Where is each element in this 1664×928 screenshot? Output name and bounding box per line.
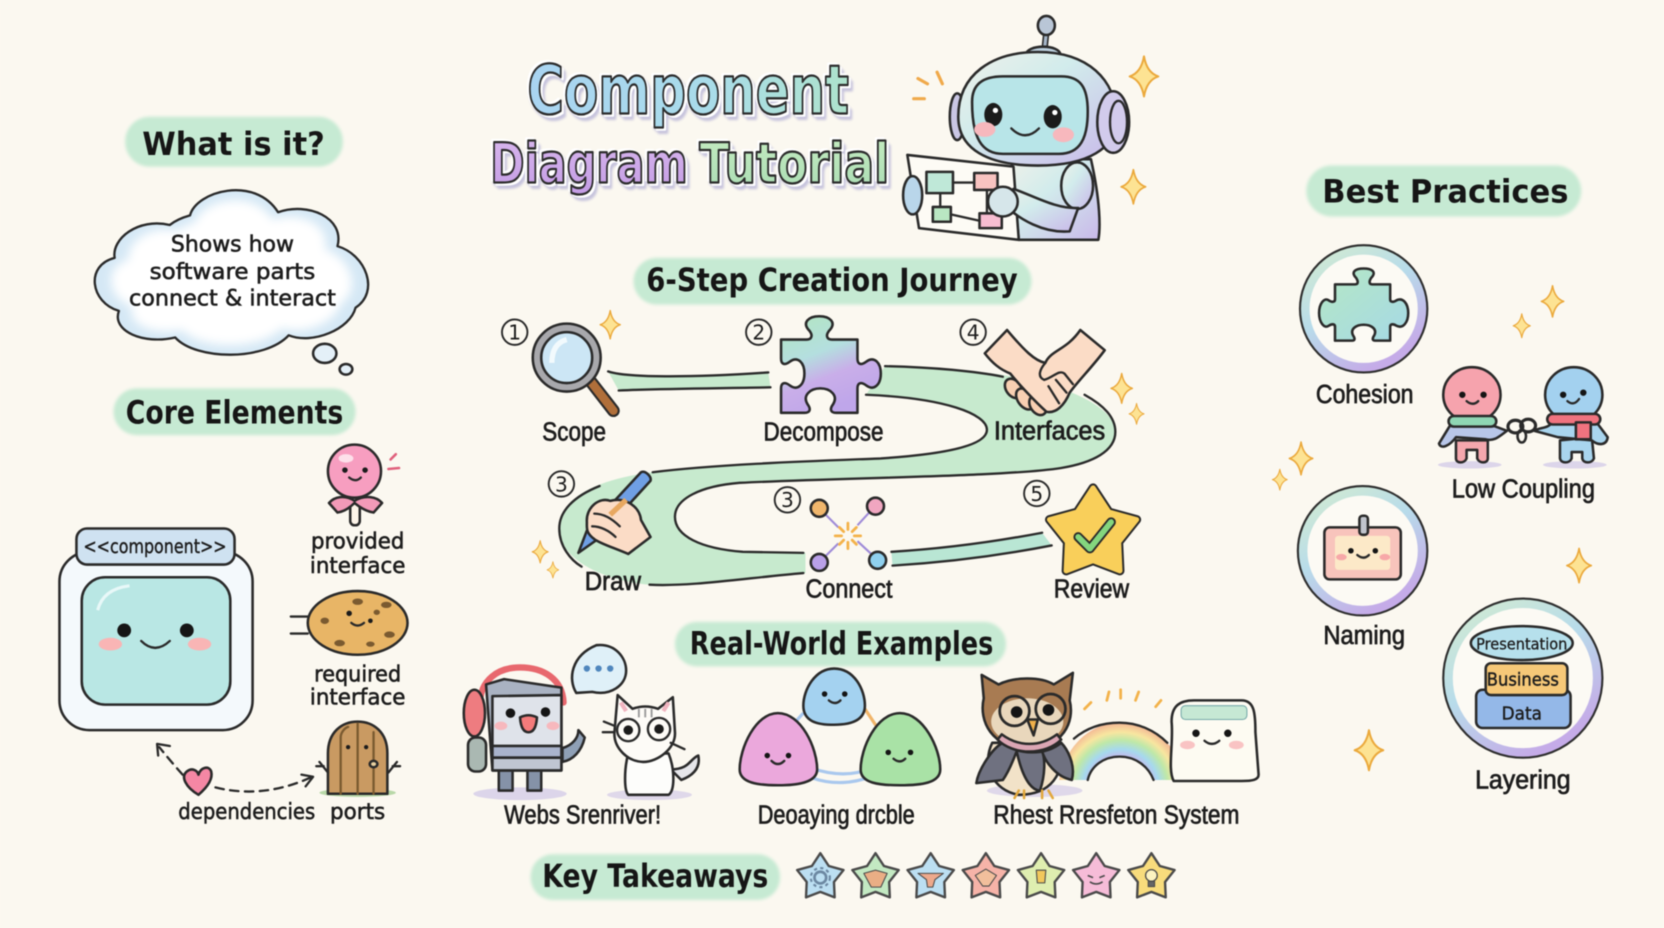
component box: <<component>> xyxy=(83,535,227,558)
step 3 smudged: draw: 3 xyxy=(555,472,568,496)
step 5: review xyxy=(1024,481,1137,603)
step 2: decompose: 2 xyxy=(752,321,765,345)
step 2: decompose xyxy=(746,316,883,446)
step 4: interfaces: 4 xyxy=(967,321,980,345)
example: owl, rainbow bridge and marshmallow xyxy=(976,673,1259,829)
layering: Presentation xyxy=(1476,634,1567,653)
star: gear xyxy=(797,853,844,897)
panel: real-world examples xyxy=(464,622,1259,829)
example: owl, rainbow bridge and marshmallow: Rhest Rresfeton System xyxy=(993,801,1239,829)
heading: best practices: Best Practices xyxy=(1322,173,1568,211)
icon: cookie xyxy=(291,591,408,655)
cohesion xyxy=(1305,250,1422,409)
step 3: connect: 3 xyxy=(781,488,794,512)
naming xyxy=(1303,491,1422,650)
sparkle xyxy=(1121,170,1146,204)
step 3 smudged: draw: Draw xyxy=(585,568,642,596)
thought cloud: connect & interact xyxy=(129,286,336,312)
heading: what is it xyxy=(125,117,343,167)
star: lantern xyxy=(1018,853,1064,897)
star: light bulb xyxy=(1128,853,1175,897)
thought cloud xyxy=(95,190,368,375)
heading: what is it: What is it? xyxy=(142,125,325,163)
example: server robot and cat xyxy=(464,645,699,829)
thought cloud: software parts xyxy=(150,259,315,285)
example: blob trio xyxy=(740,669,940,829)
sparkle xyxy=(1129,403,1144,424)
example: blob trio: Deoaying drcble xyxy=(758,801,915,829)
step 5: review: Review xyxy=(1054,575,1130,603)
heading: best practices xyxy=(1306,166,1581,216)
icon: lollipop xyxy=(328,445,399,525)
heading: core elements: Core Elements xyxy=(126,393,343,431)
star: handshake xyxy=(852,853,899,897)
panel: what is it xyxy=(95,117,368,375)
heading: journey: 6-Step Creation Journey xyxy=(646,261,1018,299)
step 1: scope: Scope xyxy=(542,418,606,446)
label: provided interface: provided xyxy=(311,529,404,555)
step 3: connect xyxy=(775,487,892,603)
layering: Business xyxy=(1487,670,1559,691)
example: server robot and cat: Webs Srenriver! xyxy=(504,801,661,829)
label: required interface xyxy=(310,661,405,711)
low coupling xyxy=(1438,367,1608,504)
title xyxy=(490,52,889,197)
label: provided interface xyxy=(310,529,405,579)
icon: door port xyxy=(316,722,400,797)
label: dependencies: dependencies xyxy=(178,799,315,825)
title: Component xyxy=(527,52,849,131)
step 2: decompose: Decompose xyxy=(764,418,883,446)
label: required interface: interface xyxy=(310,685,405,711)
star: smile xyxy=(1073,853,1119,897)
arrow: dependencies xyxy=(157,744,313,792)
panel: best practices xyxy=(1272,166,1608,794)
low coupling: Low Coupling xyxy=(1452,476,1595,504)
title: Tutorial xyxy=(699,133,889,197)
layering: Layering xyxy=(1475,766,1571,794)
sparkle xyxy=(1111,374,1132,403)
label: ports: ports xyxy=(330,799,385,825)
thought cloud: Shows how xyxy=(171,231,294,257)
panel: key takeaways xyxy=(531,853,1175,900)
cohesion: Cohesion xyxy=(1316,381,1414,409)
layering xyxy=(1449,604,1597,794)
component box xyxy=(59,528,253,730)
step 3: connect: Connect xyxy=(805,575,892,603)
icon: robot holding diagram xyxy=(903,16,1129,240)
star badges xyxy=(797,853,1175,897)
winding path xyxy=(559,366,1115,585)
step 5: review: 5 xyxy=(1030,482,1043,506)
panel: core elements xyxy=(59,388,408,825)
label: provided interface: interface xyxy=(310,553,405,579)
star: hands xyxy=(963,853,1009,897)
step 3 smudged: draw xyxy=(532,471,651,596)
step 1: scope xyxy=(502,311,620,446)
sparkles xyxy=(1272,286,1591,770)
title: Diagram xyxy=(490,133,688,197)
heading: examples: Real-World Examples xyxy=(690,625,993,663)
step 1: scope: 1 xyxy=(508,321,521,345)
star: link xyxy=(908,853,954,897)
sparkle xyxy=(1130,56,1158,96)
naming: Naming xyxy=(1323,622,1405,650)
icon: heart xyxy=(184,768,212,795)
panel: creation journey xyxy=(502,258,1144,603)
heading: key takeaways: Key Takeaways xyxy=(542,857,768,895)
layering: Data xyxy=(1502,703,1542,724)
step 4: interfaces: Interfaces xyxy=(994,417,1105,445)
step 4: interfaces xyxy=(960,319,1105,445)
label: required interface: required xyxy=(314,661,401,687)
